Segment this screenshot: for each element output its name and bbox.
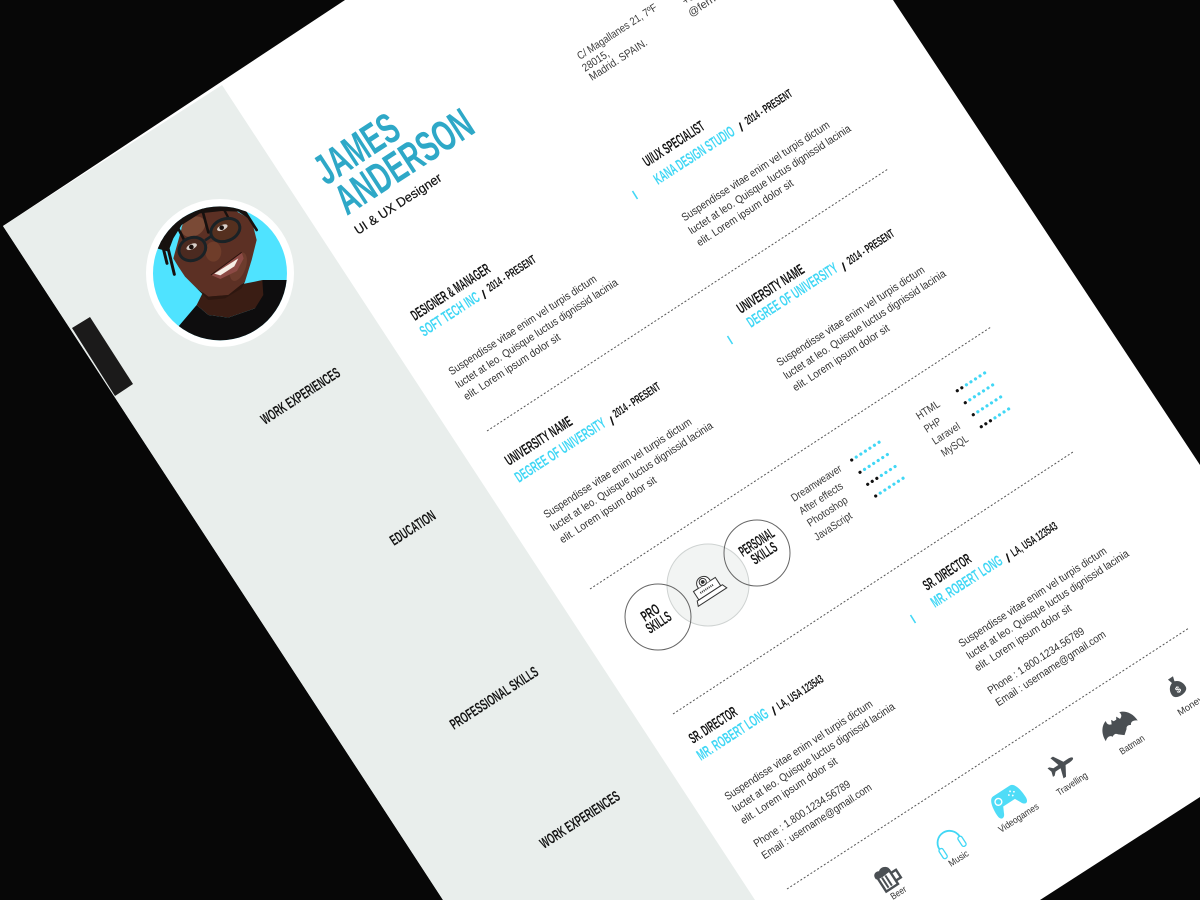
sidebar heading: work experiences: WORK EXPERIENCES — [258, 365, 343, 428]
skill list: web tech — [914, 371, 1011, 460]
portrait photo — [145, 195, 295, 350]
contact address: 28015, — [580, 48, 612, 75]
job block: ui ux specialist — [632, 86, 854, 249]
education block: university right: UNIVERSITY NAME — [734, 261, 808, 317]
reference block: right: luctet at leo. Quisque luctus dignissid lacinia — [965, 548, 1132, 662]
education block: university left — [502, 379, 716, 546]
reference block: left: LA, USA 123543 — [774, 672, 826, 713]
job block: designer and manager: elit. Lorem ipsum dolor sit — [462, 331, 563, 403]
reference block: right — [910, 519, 1132, 709]
education block: university right: DEGREE OF UNIVERSITY — [744, 260, 842, 331]
job block: designer and manager: 2014 - PRESENT — [484, 252, 539, 295]
job block: designer and manager: luctet at leo. Quisque luctus dignissid lacinia — [454, 277, 621, 391]
skill list: web tech: Laravel — [930, 421, 963, 448]
divider — [673, 452, 1073, 714]
education block: university left: UNIVERSITY NAME — [502, 413, 576, 469]
hobby: money: $ — [1173, 684, 1183, 695]
skills venn: pro skills — [625, 584, 691, 650]
job block: designer and manager: SOFT TECH INC — [417, 289, 483, 340]
name: James: JAMES — [305, 104, 409, 194]
education block: university right: elit. Lorem ipsum dolor sit — [791, 322, 892, 394]
education block: university right: Suspendisse vitae enim vel turpis dictum — [775, 264, 927, 369]
hobby: videogames — [987, 782, 1041, 836]
job block: ui ux specialist: 2014 - PRESENT — [742, 86, 795, 128]
hobby: music: Music — [947, 848, 971, 870]
skill list: web tech: MySQL — [939, 433, 971, 460]
name: Anderson: ANDERSON — [326, 100, 482, 224]
divider — [487, 169, 888, 431]
contact address — [575, 2, 660, 84]
skills venn: pro skills: SKILLS — [643, 608, 675, 637]
contact address: Madrid. SPAIN. — [587, 37, 650, 84]
reference block: right: Suspendisse vitae enim vel turpis dictum — [957, 545, 1109, 650]
reference block: right: Email : username@gmail.com — [994, 629, 1108, 709]
black tab — [72, 317, 133, 396]
reference block: left: SR. DIRECTOR — [686, 704, 741, 747]
reference block: left: MR. ROBERT LONG — [694, 705, 772, 764]
reference block: right: MR. ROBERT LONG — [928, 552, 1006, 611]
skill list: design tools — [789, 440, 905, 544]
skills venn: personal skills: SKILLS — [748, 539, 781, 568]
divider — [787, 628, 1189, 889]
skill list: web tech: PHP — [922, 416, 944, 436]
reference block: left: Phone : 1.800.1234.56789 — [752, 778, 853, 850]
contact phone and web — [680, 0, 756, 20]
job block: ui ux specialist: luctet at leo. Quisque luctus dignissid lacinia — [687, 123, 854, 237]
education block: university left: 2014 - PRESENT — [610, 379, 663, 421]
job block: ui ux specialist: Suspendisse vitae enim vel turpis dictum — [680, 119, 832, 224]
job title: UI & UX Designer — [351, 170, 445, 238]
education block: university left: Suspendisse vitae enim vel turpis dictum — [542, 416, 694, 521]
reference block: left: luctet at leo. Quisque luctus dignissid lacinia — [731, 701, 898, 815]
reference block: right: LA, USA 123543 — [1008, 519, 1060, 560]
hobby: money — [1164, 674, 1200, 719]
skills venn: center circle — [667, 544, 749, 626]
hobby: batman: Batman — [1118, 733, 1147, 758]
hobby: travelling — [1044, 748, 1090, 799]
hobby: travelling: Travelling — [1055, 770, 1090, 799]
education block: university right: 2014 - PRESENT — [844, 226, 897, 268]
education block: university left: elit. Lorem ipsum dolor sit — [558, 474, 659, 546]
skill list: design tools: Dreamweaver — [789, 463, 845, 505]
skill list: web tech: HTML — [914, 398, 942, 423]
job block: designer and manager: DESIGNER & MANAGER — [408, 260, 494, 324]
divider — [590, 327, 991, 589]
skill list: design tools: JavaScript — [812, 510, 855, 544]
reference block: right: SR. DIRECTOR — [920, 551, 975, 594]
education block: university right — [728, 226, 949, 394]
education block: university left: DEGREE OF UNIVERSITY — [512, 415, 610, 486]
skills venn: personal skills — [724, 520, 790, 586]
reference block: left: Email : username@gmail.com — [760, 782, 874, 862]
education block: university right: luctet at leo. Quisque luctus dignissid lacinia — [782, 268, 949, 382]
skills venn: pro skills: PRO — [638, 601, 663, 625]
reference block: left: Suspendisse vitae enim vel turpis dictum — [723, 698, 875, 803]
hobby: music — [932, 825, 971, 870]
sidebar heading: work experiences 2: WORK EXPERIENCES — [537, 788, 623, 852]
job block: ui ux specialist: elit. Lorem ipsum dolor sit — [695, 177, 796, 249]
education block: university left: luctet at leo. Quisque luctus dignissid lacinia — [549, 420, 716, 534]
hobby: beer — [872, 862, 909, 900]
job block: designer and manager — [408, 252, 621, 403]
reference block: left — [686, 672, 898, 862]
hobby: batman — [1097, 706, 1147, 758]
reference block: left: elit. Lorem ipsum dolor sit — [739, 755, 840, 827]
icon: webcam on laptop — [686, 568, 727, 606]
hobby: videogames: Videogames — [997, 801, 1041, 836]
panel: sidebar — [3, 85, 755, 900]
sidebar heading: education: EDUCATION — [387, 507, 439, 549]
skill list: design tools: Photoshop — [805, 494, 850, 530]
reference block: right: elit. Lorem ipsum dolor sit — [973, 602, 1074, 674]
job block: ui ux specialist: UI/UX SPECIALIST — [640, 118, 708, 170]
skills venn: personal skills: PERSONAL — [736, 525, 778, 560]
job block: designer and manager: Suspendisse vitae enim vel turpis dictum — [447, 273, 599, 378]
job block: ui ux specialist: KANA DESIGN STUDIO — [651, 123, 738, 188]
reference block: right: Phone : 1.800.1234.56789 — [986, 625, 1087, 697]
skill list: design tools: After effects — [797, 480, 846, 518]
sidebar heading: professional skills: PROFESSIONAL SKILLS — [447, 664, 542, 733]
